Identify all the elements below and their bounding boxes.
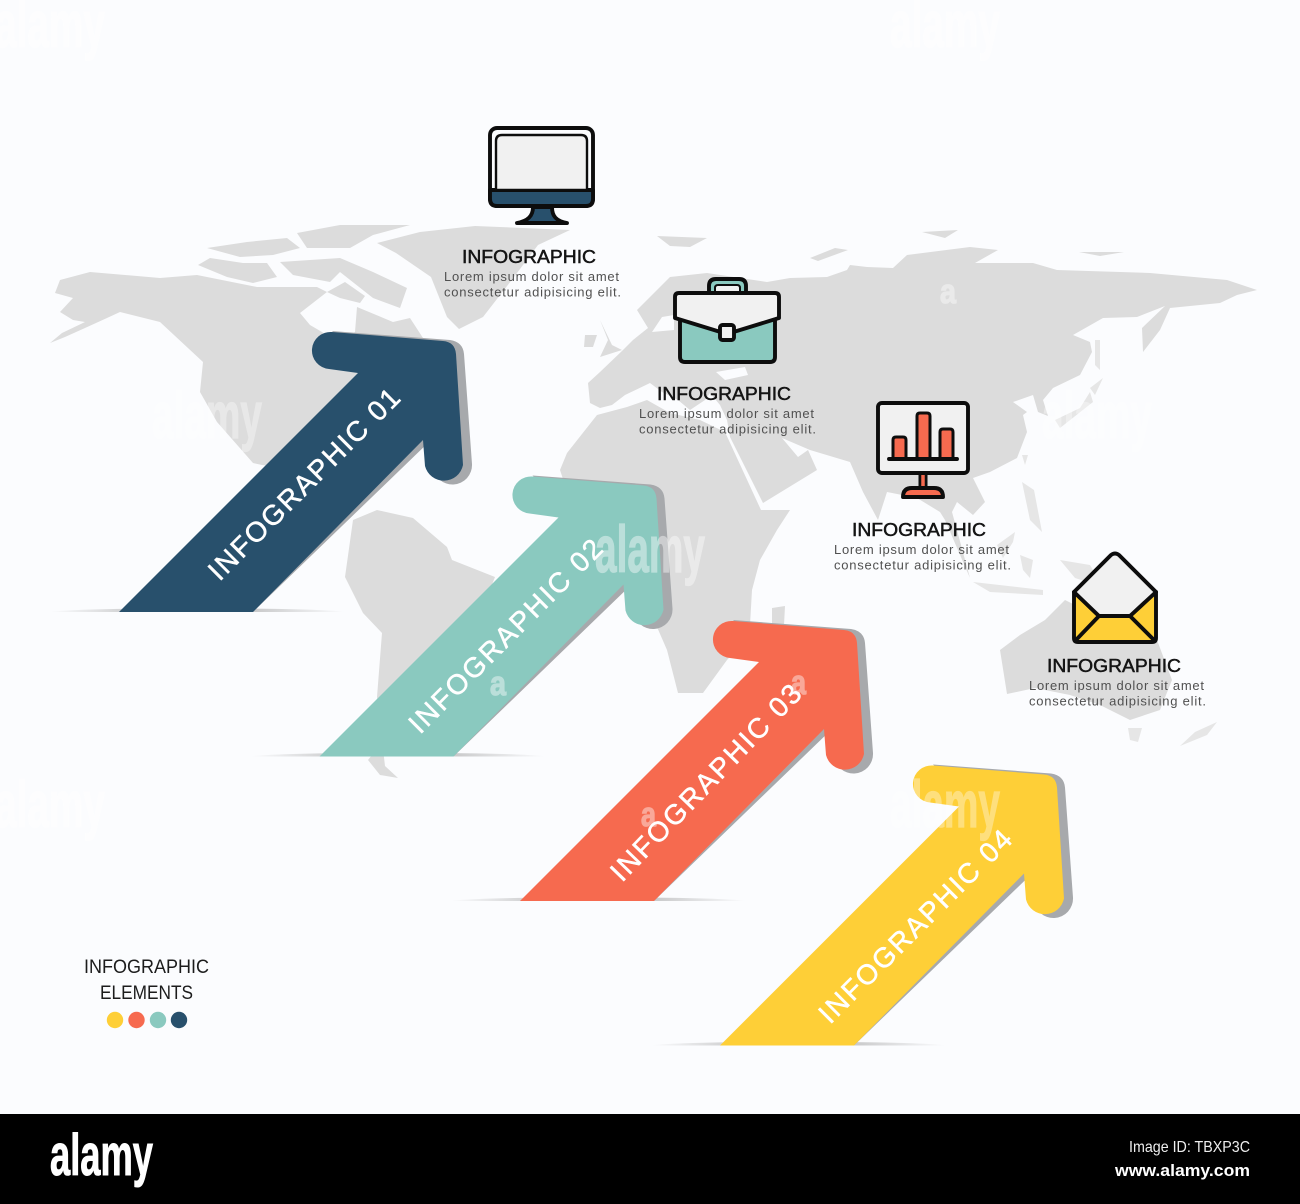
legend: infographic elements: ELEMENTS	[100, 983, 193, 1004]
legend: infographic elements	[84, 957, 209, 1028]
tail shadow 2	[250, 753, 546, 756]
arrow label 4: INFOGRAPHIC 04	[812, 823, 1018, 1029]
icon: open envelope	[1074, 554, 1156, 642]
text block 1: INFOGRAPHIC	[462, 246, 596, 267]
landmass: Greenland	[377, 226, 570, 329]
text block 1: Lorem ipsum dolor sit amet	[444, 269, 619, 284]
watermarks: alamy	[0, 767, 105, 841]
tail shadow 3	[451, 897, 746, 901]
image id: Image ID: TBXP3C	[1129, 1139, 1250, 1156]
text block 1: consectetur adipisicing elit.	[444, 284, 621, 300]
tail shadow 1	[50, 608, 345, 612]
text block 4: consectetur adipisicing elit.	[1029, 694, 1206, 708]
landmass: Australia	[1000, 600, 1172, 720]
arrow 2: teal	[250, 476, 673, 756]
arrow shadow 1	[253, 331, 472, 612]
watermarks: a	[641, 796, 657, 834]
icon: briefcase	[675, 279, 779, 362]
watermarks: a	[490, 665, 507, 703]
watermarks: alamy	[1042, 378, 1152, 452]
text block 4: INFOGRAPHIC	[1047, 655, 1181, 676]
arrow 4: yellow	[651, 764, 1073, 1046]
text block 3: Lorem ipsum dolor sit amet	[834, 542, 1009, 557]
arrow shadow 3	[654, 620, 873, 901]
text block 1	[444, 246, 621, 300]
arrow label 1: INFOGRAPHIC 01	[202, 382, 406, 586]
icon: bar chart board	[878, 403, 968, 497]
arrow body 4	[720, 765, 1064, 1046]
text block 3: consectetur adipisicing elit.	[834, 558, 1011, 572]
text block 4: Lorem ipsum dolor sit amet	[1029, 678, 1204, 693]
arrow 1: navy	[50, 331, 472, 612]
landmass: North America	[50, 272, 425, 470]
arrow body 1	[119, 332, 463, 612]
website: www.alamy.com	[1114, 1161, 1250, 1180]
landmass: Tasmania and New Zealand	[1128, 722, 1217, 746]
landmass: Madagascar	[772, 606, 785, 632]
footer logo: alamy	[50, 1123, 153, 1188]
arrow label 2: INFOGRAPHIC 02	[402, 533, 609, 739]
text block 3: INFOGRAPHIC	[852, 519, 986, 540]
arrow 3: coral	[451, 620, 873, 901]
arrow body 3	[520, 621, 864, 901]
text block 2: Lorem ipsum dolor sit amet	[639, 406, 814, 421]
inland seas	[652, 315, 748, 380]
text block 3	[834, 519, 1011, 572]
arrow label 3: INFOGRAPHIC 03	[604, 678, 808, 887]
watermarks: alamy	[890, 767, 1000, 841]
world map	[50, 225, 1257, 778]
landmass: South America	[345, 510, 495, 778]
arrow shadow 4	[854, 764, 1073, 1046]
footer band	[0, 1114, 1300, 1204]
arrow shadow 2	[454, 476, 673, 756]
landmass: British Isles and northern islands	[584, 230, 1124, 357]
watermarks: a	[791, 664, 807, 702]
legend: infographic elements: INFOGRAPHIC	[84, 957, 209, 978]
landmass: Eurasia	[588, 247, 1257, 578]
text block 2	[639, 383, 816, 436]
landmass: Arctic islands	[198, 225, 410, 308]
text block 2: consectetur adipisicing elit.	[639, 422, 816, 436]
arrow body 2	[320, 476, 664, 756]
watermarks: alamy	[152, 378, 262, 452]
text block 4	[1029, 655, 1206, 708]
tail shadow 4	[651, 1042, 946, 1046]
landmass: Africa	[560, 400, 790, 693]
text block 2: INFOGRAPHIC	[657, 383, 791, 404]
watermarks	[0, 0, 1152, 841]
landmass: Japan and Southeast Asia islands	[973, 340, 1103, 595]
watermarks: a	[940, 273, 957, 311]
icon: monitor	[490, 128, 593, 223]
watermarks: alamy	[595, 512, 705, 586]
